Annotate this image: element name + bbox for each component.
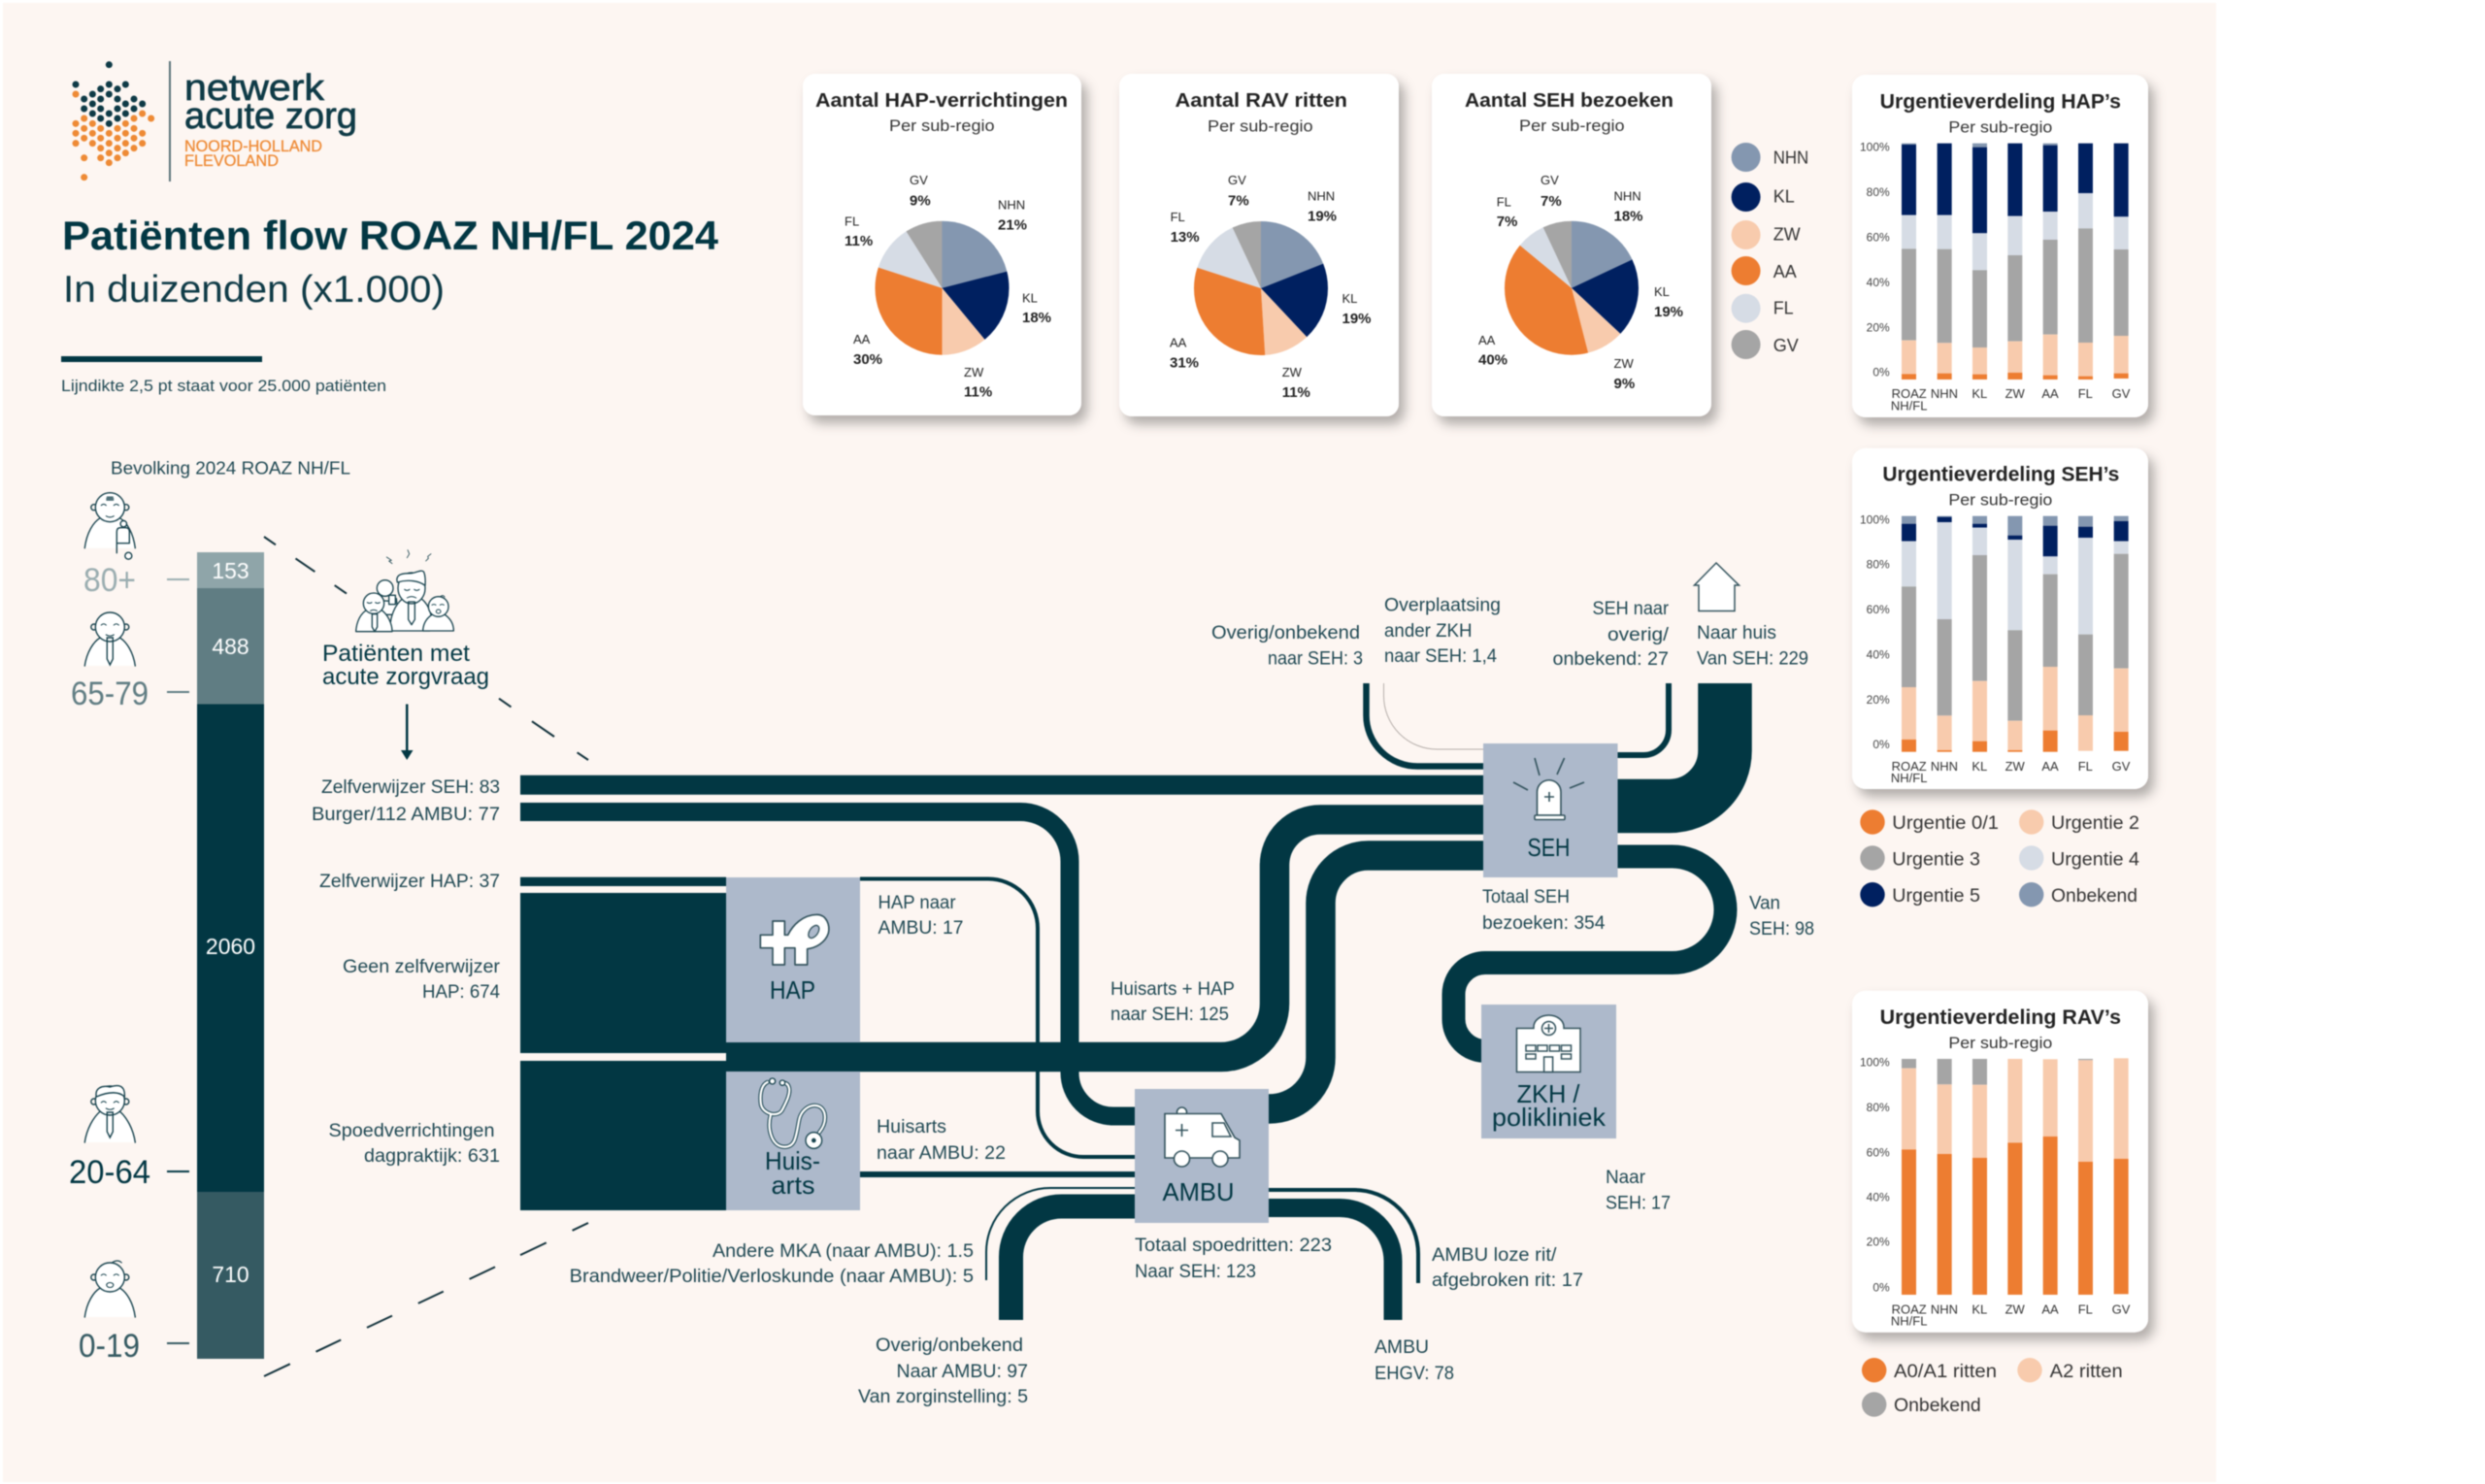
box: ZKH / polikliniek bbox=[1481, 1005, 1616, 1138]
label: SEH naar overig: SEH naar bbox=[1592, 599, 1670, 619]
legend: sub-regions: AA bbox=[1773, 262, 1797, 281]
axis labels: 0% bbox=[1872, 1280, 1890, 1294]
label: SEH naar overig bbox=[1553, 599, 1670, 670]
label: overplaatsing: Overplaatsing bbox=[1384, 596, 1501, 615]
pie labels: 7% bbox=[1497, 214, 1517, 230]
legend: urgency levels: Urgentie 2 bbox=[2051, 813, 2139, 834]
pie labels: 18% bbox=[1022, 310, 1051, 326]
label: naar huis bbox=[1697, 623, 1808, 670]
pie labels: FL bbox=[1497, 195, 1511, 210]
pie labels bbox=[845, 173, 1051, 401]
population stacked column: 488 bbox=[212, 634, 249, 659]
heading: patients with acute care question: Patiënten met bbox=[322, 641, 470, 667]
age labels and ticks: 0-19 bbox=[79, 1328, 140, 1365]
pie labels: KL bbox=[1022, 291, 1038, 306]
panel: urgentieverdeling HAP's bbox=[1852, 75, 2148, 417]
axis labels: 60% bbox=[1867, 603, 1890, 616]
axis labels: 100% bbox=[1860, 1056, 1890, 1070]
label: spoedverrichtingen: dagpraktijk: 631 bbox=[364, 1146, 500, 1167]
x axis labels: NH/FL bbox=[1891, 398, 1927, 412]
legend: urgency levels: Urgentie 0/1 bbox=[1892, 813, 1999, 834]
line thickness note: Lijndikte 2,5 pt staat voor 25.000 patiënten bbox=[61, 377, 386, 395]
box: ZKH / polikliniek: ZKH / bbox=[1516, 1079, 1580, 1108]
legend: sub-regions: KL bbox=[1773, 186, 1795, 206]
label: andere MKA bbox=[570, 1241, 974, 1287]
legend: RAV urgency: A2 ritten bbox=[2050, 1362, 2123, 1382]
label: overig naar AMBU: Naar AMBU: 97 bbox=[897, 1362, 1028, 1382]
pie chart bbox=[909, 254, 976, 321]
heading: patients with acute care question bbox=[322, 641, 489, 690]
logo: netwerk acute zorg: FLEVOLAND bbox=[184, 151, 279, 170]
age labels and ticks: 20-64 bbox=[69, 1154, 150, 1191]
axis labels: 80% bbox=[1867, 558, 1890, 572]
arrow: down bbox=[401, 705, 414, 760]
pie labels: 21% bbox=[998, 217, 1027, 234]
panel: pie HAP-verrichtingen bbox=[803, 74, 1081, 415]
axis labels bbox=[1860, 141, 1890, 379]
label: huisarts + HAP naar SEH: naar SEH: 125 bbox=[1110, 1005, 1229, 1025]
icon: HAP logo bbox=[760, 914, 829, 965]
axis labels: 80% bbox=[1867, 1101, 1890, 1114]
line thickness legend bbox=[61, 356, 262, 362]
flow: SEH to home bbox=[1615, 683, 1725, 806]
pie labels: 9% bbox=[910, 193, 931, 210]
pie labels: 19% bbox=[1342, 311, 1372, 327]
x axis labels: GV bbox=[2112, 759, 2131, 774]
pie labels: AA bbox=[1478, 333, 1496, 347]
label: totaal SEH: bezoeken: 354 bbox=[1482, 913, 1606, 934]
label: AMBU loze rit: AMBU loze rit/ bbox=[1432, 1245, 1557, 1266]
legend: urgency levels: Urgentie 3 bbox=[1892, 850, 1980, 871]
x axis labels: FL bbox=[2078, 759, 2093, 774]
legend: urgency levels bbox=[1860, 809, 2139, 907]
box: SEH bbox=[1483, 743, 1617, 877]
logo: netwerk acute zorg bbox=[72, 61, 357, 181]
axis labels: 40% bbox=[1867, 276, 1890, 289]
axis labels: 40% bbox=[1867, 1190, 1890, 1204]
axis labels: 100% bbox=[1860, 512, 1890, 526]
label: totaal spoedritten: Naar SEH: 123 bbox=[1135, 1262, 1256, 1282]
flow: zelfverwijzer SEH bbox=[520, 775, 1485, 795]
label: naar huis: Van SEH: 229 bbox=[1697, 648, 1808, 670]
panel: urgentieverdeling RAV's bbox=[1852, 991, 2148, 1333]
population heading: Bevolking 2024 ROAZ NH/FL bbox=[111, 458, 350, 478]
age labels and ticks: 80+ bbox=[83, 562, 136, 599]
population stacked column: 2060 bbox=[206, 934, 255, 959]
x axis labels: FL bbox=[2078, 386, 2093, 401]
box: AMBU bbox=[1135, 1089, 1269, 1223]
panel heading: Aantal RAV ritten bbox=[1175, 89, 1347, 112]
axis labels bbox=[1860, 512, 1890, 751]
label: spoedverrichtingen bbox=[328, 1121, 500, 1167]
pie labels: 19% bbox=[1308, 209, 1337, 225]
pie labels: AA bbox=[853, 332, 871, 346]
x axis labels: AA bbox=[2041, 1302, 2059, 1316]
pie labels: ZW bbox=[964, 365, 984, 379]
x axis labels: GV bbox=[2112, 386, 2131, 401]
pie chart bbox=[1227, 254, 1295, 322]
pie labels: ZW bbox=[1613, 356, 1634, 371]
x axis labels: NH/FL bbox=[1891, 1313, 1927, 1328]
panel heading: Aantal HAP-verrichtingen bbox=[815, 89, 1068, 112]
panel heading: Urgentieverdeling HAP’s bbox=[1880, 91, 2121, 114]
icon: group of patients bbox=[356, 550, 453, 632]
box: huisarts: arts bbox=[771, 1171, 815, 1200]
x axis labels: NHN bbox=[1931, 1302, 1958, 1316]
panel subheading: Per sub-regio bbox=[1948, 118, 2052, 137]
panel: pie RAV ritten bbox=[1119, 74, 1399, 416]
icon: stethoscope bbox=[760, 1078, 825, 1148]
label: naar SEH 17 bbox=[1606, 1168, 1671, 1213]
axis labels: 20% bbox=[1867, 693, 1890, 707]
x axis labels: AA bbox=[2041, 759, 2059, 774]
label: andere MKA: Andere MKA (naar AMBU): 1.5 bbox=[712, 1241, 974, 1262]
icon: house bbox=[1695, 563, 1740, 611]
panel subheading: Per sub-regio bbox=[1948, 491, 2052, 510]
stacked bars bbox=[1902, 1058, 2129, 1295]
icon: child bbox=[84, 1261, 135, 1317]
zoom dashed lines bbox=[264, 537, 588, 1376]
axis labels: 0% bbox=[1872, 738, 1890, 751]
flow: AMBU to EHGV bbox=[1267, 1207, 1393, 1320]
label: overig naar SEH: naar SEH: 3 bbox=[1268, 648, 1363, 670]
panel: urgentieverdeling SEH's bbox=[1852, 448, 2148, 789]
logo: netwerk acute zorg: acute zorg bbox=[184, 96, 357, 137]
title: Patiënten flow ROAZ NH/FL 2024 bbox=[62, 213, 719, 258]
x axis labels: KL bbox=[1971, 1302, 1987, 1316]
label: huisarts + HAP naar SEH: Huisarts + HAP bbox=[1110, 979, 1235, 1000]
label: AMBU EHGV: EHGV: 78 bbox=[1375, 1364, 1454, 1384]
pie chart bbox=[1538, 254, 1606, 321]
label: andere MKA: Brandweer/Politie/Verloskunde (naar AMBU): 5 bbox=[570, 1267, 974, 1287]
label: AMBU loze rit: afgebroken rit: 17 bbox=[1432, 1270, 1583, 1291]
label: huisarts naar AMBU: Huisarts bbox=[877, 1117, 946, 1138]
icon: adult person bbox=[84, 1086, 135, 1142]
axis labels: 80% bbox=[1867, 185, 1890, 199]
label: huisarts naar AMBU bbox=[877, 1117, 1006, 1164]
pie labels: 13% bbox=[1171, 229, 1200, 246]
population stacked column: 153 bbox=[212, 558, 249, 583]
legend: RAV urgency: Onbekend bbox=[1894, 1396, 1981, 1416]
x axis labels bbox=[1891, 759, 2131, 785]
pie labels: GV bbox=[910, 173, 928, 187]
logo: netwerk acute zorg: netwerk bbox=[184, 68, 325, 109]
label: HAP naar AMBU: AMBU: 17 bbox=[878, 918, 963, 939]
pie labels: 30% bbox=[853, 351, 882, 368]
x axis labels: KL bbox=[1971, 759, 1987, 774]
x axis labels: NHN bbox=[1931, 386, 1958, 401]
pie labels: FL bbox=[1171, 210, 1185, 224]
x axis labels: ZW bbox=[2005, 1302, 2026, 1316]
label: overplaatsing: naar SEH: 1,4 bbox=[1384, 646, 1497, 667]
pie labels: NHN bbox=[1308, 189, 1335, 204]
label: zelfverwijzer SEH: Zelfverwijzer SEH: 83 bbox=[321, 777, 500, 798]
icon: elderly person with walker bbox=[84, 493, 135, 559]
panel: pie SEH bezoeken bbox=[1432, 74, 1711, 416]
flow: overplaatsing to SEH bbox=[1383, 683, 1485, 749]
pie labels: 11% bbox=[1282, 384, 1310, 401]
label: geen zelfverwijzer bbox=[343, 957, 501, 1003]
label: AMBU EHGV bbox=[1375, 1337, 1454, 1384]
label: totaal spoedritten: Totaal spoedritten: 223 bbox=[1135, 1236, 1332, 1256]
label: overplaatsing: ander ZKH bbox=[1384, 621, 1472, 642]
x axis labels: ROAZ bbox=[1892, 386, 1927, 401]
icon: senior person bbox=[84, 612, 135, 666]
box: SEH: SEH bbox=[1528, 833, 1571, 862]
x axis labels: ZW bbox=[2005, 759, 2026, 774]
box: ZKH / polikliniek: polikliniek bbox=[1492, 1103, 1607, 1132]
stacked bars bbox=[1902, 144, 2129, 379]
axis labels: 0% bbox=[1872, 366, 1890, 379]
pie labels: KL bbox=[1342, 291, 1357, 306]
panel subheading: Per sub-regio bbox=[889, 117, 995, 135]
label: overplaatsing bbox=[1384, 596, 1501, 667]
axis labels: 20% bbox=[1867, 1235, 1890, 1248]
label: zelfverwijzer HAP: Zelfverwijzer HAP: 37 bbox=[319, 872, 500, 892]
icon: emergency beacon bbox=[1513, 758, 1584, 819]
pie labels: AA bbox=[1170, 336, 1187, 350]
pie labels bbox=[1478, 173, 1683, 392]
logo dots bbox=[72, 61, 154, 181]
pie labels: 11% bbox=[845, 233, 873, 249]
flow: burger/112 to AMBU bbox=[520, 811, 1138, 1116]
pie labels: FL bbox=[845, 214, 859, 229]
axis labels: 100% bbox=[1860, 141, 1890, 154]
box: huisarts bbox=[726, 1072, 860, 1210]
label: huisarts naar AMBU: naar AMBU: 22 bbox=[877, 1143, 1006, 1164]
axis labels bbox=[1860, 1056, 1890, 1294]
panel subheading: Per sub-regio bbox=[1208, 118, 1313, 136]
age labels and ticks: 65-79 bbox=[71, 676, 149, 712]
flow: andere MKA to AMBU bbox=[986, 1188, 1138, 1280]
legend: sub-regions: NHN bbox=[1773, 148, 1808, 167]
legend: sub-regions bbox=[1732, 143, 1808, 359]
flow: AMBU loze rit bbox=[1267, 1190, 1418, 1283]
axis labels: 20% bbox=[1867, 320, 1890, 334]
label: van SEH: Van bbox=[1749, 893, 1780, 914]
pie labels: 19% bbox=[1654, 304, 1683, 320]
pie labels: GV bbox=[1541, 173, 1559, 187]
legend: RAV urgency: A0/A1 ritten bbox=[1894, 1362, 1997, 1382]
subtitle: In duizenden (x1.000) bbox=[63, 269, 445, 311]
population stacked column bbox=[197, 552, 264, 1359]
label: overig naar AMBU bbox=[858, 1336, 1028, 1407]
legend: RAV urgency bbox=[1862, 1358, 2123, 1417]
axis labels: 40% bbox=[1867, 647, 1890, 661]
pie labels bbox=[1170, 173, 1372, 401]
label: HAP naar AMBU bbox=[878, 893, 963, 939]
legend: sub-regions: ZW bbox=[1773, 225, 1801, 245]
flow: overig to SEH bbox=[1367, 683, 1485, 767]
x axis labels: KL bbox=[1971, 386, 1987, 401]
pie labels: NHN bbox=[998, 198, 1025, 213]
label: HAP naar AMBU: HAP naar bbox=[878, 893, 956, 913]
box: HAP: HAP bbox=[770, 975, 815, 1005]
stacked bars bbox=[1902, 516, 2129, 752]
panel subheading: Per sub-regio bbox=[1519, 117, 1625, 135]
x axis labels: ROAZ bbox=[1892, 759, 1927, 774]
pie labels: 11% bbox=[964, 384, 992, 401]
sankey flows bbox=[520, 683, 1725, 1320]
box: huisarts: Huis- bbox=[765, 1146, 820, 1175]
panel subheading: Per sub-regio bbox=[1948, 1034, 2052, 1052]
x axis labels: AA bbox=[2041, 386, 2059, 401]
x axis labels: ROAZ bbox=[1892, 1302, 1927, 1316]
label: spoedverrichtingen: Spoedverrichtingen bbox=[328, 1121, 495, 1141]
icon: hospital bbox=[1516, 1015, 1580, 1072]
panel heading: Aantal SEH bezoeken bbox=[1465, 89, 1673, 112]
label: burger/112: Burger/112 AMBU: 77 bbox=[312, 805, 500, 825]
x axis labels: NHN bbox=[1931, 759, 1958, 774]
pie labels: ZW bbox=[1282, 365, 1303, 379]
entry bars bbox=[520, 877, 726, 1210]
axis labels: 60% bbox=[1867, 1145, 1890, 1159]
label: geen zelfverwijzer: HAP: 674 bbox=[422, 982, 500, 1003]
pie labels: GV bbox=[1228, 173, 1246, 187]
pie labels: 7% bbox=[1541, 193, 1562, 210]
legend: sub-regions: FL bbox=[1773, 299, 1794, 318]
population stacked column: 710 bbox=[212, 1262, 249, 1287]
box: HAP bbox=[726, 877, 860, 1042]
label: geen zelfverwijzer: Geen zelfverwijzer bbox=[343, 957, 501, 977]
flow: huisarts to AMBU bbox=[860, 1171, 1138, 1177]
label: overig naar AMBU: Overig/onbekend bbox=[876, 1336, 1023, 1356]
x axis labels: NH/FL bbox=[1891, 771, 1927, 785]
x axis labels: ZW bbox=[2005, 386, 2026, 401]
legend: urgency levels: Urgentie 5 bbox=[1892, 886, 1980, 907]
label: naar SEH 17: Naar bbox=[1606, 1168, 1646, 1188]
label: totaal SEH bbox=[1482, 887, 1606, 934]
pie labels: 9% bbox=[1613, 376, 1635, 392]
logo: netwerk acute zorg: NOORD-HOLLAND bbox=[184, 137, 322, 155]
label: naar huis: Naar huis bbox=[1697, 623, 1776, 643]
box: AMBU: AMBU bbox=[1163, 1177, 1235, 1206]
flow: HAP to AMBU bbox=[860, 879, 1138, 1157]
x axis labels: FL bbox=[2078, 1302, 2093, 1316]
flow: SEH to ZKH bbox=[1454, 856, 1725, 1051]
label: van SEH: SEH: 98 bbox=[1749, 919, 1814, 940]
x axis labels bbox=[1891, 386, 2131, 412]
pie labels: 7% bbox=[1228, 193, 1249, 210]
flow: huisarts + HAP to SEH bbox=[726, 819, 1485, 1057]
pie labels: NHN bbox=[1613, 189, 1641, 204]
heading: patients with acute care question: acute zorgvraag bbox=[322, 664, 489, 690]
label: SEH naar overig: overig/ bbox=[1607, 625, 1670, 645]
label: van SEH bbox=[1749, 893, 1814, 940]
pie labels: KL bbox=[1654, 284, 1670, 299]
label: totaal spoedritten bbox=[1135, 1236, 1332, 1282]
pie labels: 31% bbox=[1170, 355, 1199, 372]
legend: sub-regions: GV bbox=[1773, 336, 1799, 355]
axis labels: 60% bbox=[1867, 230, 1890, 244]
label: totaal SEH: Totaal SEH bbox=[1482, 887, 1570, 907]
label: naar SEH 17: SEH: 17 bbox=[1606, 1194, 1671, 1213]
flow: overig to AMBU bbox=[1011, 1206, 1138, 1320]
age labels and ticks bbox=[69, 562, 189, 1365]
legend: urgency levels: Onbekend bbox=[2051, 886, 2137, 907]
legend: urgency levels: Urgentie 4 bbox=[2051, 850, 2139, 871]
flow: SEH to overig bbox=[1615, 683, 1669, 755]
x axis labels bbox=[1891, 1302, 2131, 1328]
label: AMBU EHGV: AMBU bbox=[1375, 1337, 1429, 1358]
label: huisarts + HAP naar SEH bbox=[1110, 979, 1235, 1025]
label: overig naar AMBU: Van zorginstelling: 5 bbox=[858, 1387, 1028, 1407]
label: overig naar SEH: Overig/onbekend bbox=[1211, 623, 1360, 643]
panel heading: Urgentieverdeling SEH’s bbox=[1882, 464, 2119, 486]
label: SEH naar overig: onbekend: 27 bbox=[1553, 649, 1669, 670]
label: overig naar SEH bbox=[1211, 623, 1363, 670]
pie labels: 18% bbox=[1613, 209, 1643, 225]
label: AMBU loze rit bbox=[1432, 1245, 1583, 1291]
flow: AMBU to SEH bbox=[1267, 856, 1485, 1108]
x axis labels: GV bbox=[2112, 1302, 2131, 1316]
icon: ambulance bbox=[1165, 1107, 1240, 1167]
panel heading: Urgentieverdeling RAV’s bbox=[1880, 1006, 2121, 1029]
pie labels: 40% bbox=[1478, 352, 1508, 369]
